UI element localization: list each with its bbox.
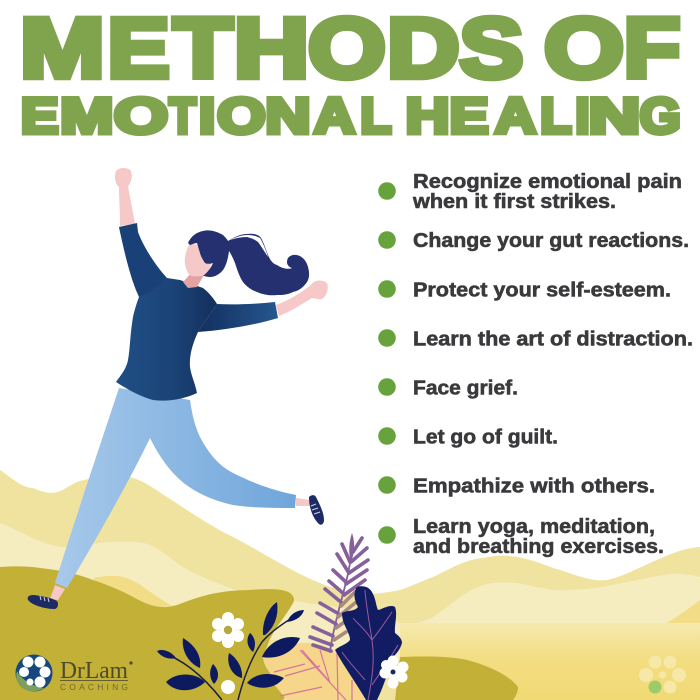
logo emblem bbox=[16, 654, 52, 692]
sweater extended sleeve bbox=[198, 302, 278, 332]
title bbox=[20, 1, 681, 144]
logo divider bbox=[60, 679, 128, 682]
back shoe bbox=[309, 495, 324, 525]
purple feather leaf bbox=[310, 533, 368, 652]
DrLam Coaching logo bbox=[16, 654, 133, 692]
title: D bbox=[387, 1, 460, 95]
title: A bbox=[314, 88, 355, 144]
white flower large bbox=[212, 612, 244, 648]
woman jumping figure bbox=[28, 168, 328, 609]
title: T bbox=[169, 88, 196, 144]
title: F bbox=[624, 1, 680, 95]
title: O bbox=[308, 1, 386, 95]
landscape background bbox=[0, 470, 700, 700]
title: O bbox=[217, 88, 266, 144]
title: O bbox=[544, 1, 624, 95]
title: T bbox=[174, 1, 232, 95]
item: face grief: Face grief. bbox=[413, 376, 518, 400]
title: O bbox=[114, 88, 168, 144]
title: E bbox=[450, 88, 489, 144]
title: N bbox=[589, 88, 640, 144]
title: L bbox=[540, 88, 572, 144]
watermark flower bbox=[639, 656, 686, 694]
item: learn yoga, meditation and breathing: Learn yoga, meditation, bbox=[413, 515, 655, 538]
item: recognize emotional pain: when it first strikes. bbox=[412, 190, 616, 213]
raised arm and fist bbox=[115, 168, 135, 226]
item: learn yoga, meditation and breathing bbox=[378, 515, 664, 558]
item: recognize emotional pain: Recognize emotional pain bbox=[413, 170, 682, 193]
title: I bbox=[199, 88, 215, 144]
title: M bbox=[20, 1, 105, 95]
logo registered mark bbox=[129, 661, 133, 665]
title: E bbox=[108, 1, 170, 95]
bullet list bbox=[378, 170, 693, 558]
title: M bbox=[60, 88, 113, 144]
item: learn yoga, meditation and breathing: and breathing exercises. bbox=[413, 535, 664, 558]
title: H bbox=[234, 1, 309, 95]
item: change your gut reactions: Change your gut reactions. bbox=[413, 229, 689, 252]
title: N bbox=[265, 88, 310, 144]
title: G bbox=[640, 88, 681, 144]
plants bbox=[157, 533, 408, 700]
white flower right bbox=[380, 656, 408, 688]
title: E bbox=[21, 88, 59, 144]
neck bbox=[183, 272, 204, 288]
extended arm and fist bbox=[276, 281, 328, 316]
item: let go of guilt: Let go of guilt. bbox=[413, 426, 558, 448]
title: L bbox=[360, 88, 390, 144]
title: I bbox=[575, 88, 590, 144]
face bbox=[185, 243, 211, 276]
item: recognize emotional pain bbox=[378, 170, 682, 213]
logo wordmark: DrLam bbox=[60, 658, 128, 684]
logo subtitle: COACHING bbox=[60, 682, 128, 692]
white flower small bbox=[221, 680, 235, 694]
sweater torso bbox=[116, 278, 217, 401]
item: empathize with others: Empathize with others. bbox=[413, 474, 655, 498]
hair and ponytail bbox=[188, 230, 309, 295]
left branch with navy leaves bbox=[157, 602, 304, 700]
title: H bbox=[406, 88, 449, 144]
ankles bbox=[50, 498, 310, 600]
sweater raised sleeve bbox=[119, 223, 167, 297]
item: learn the art of distraction: Learn the art of distraction. bbox=[413, 328, 693, 350]
dark oak leaf bbox=[335, 586, 402, 700]
peach leaf bbox=[263, 643, 370, 700]
item: protect your self-esteem: Protect your self-esteem. bbox=[413, 278, 671, 302]
front shoe bbox=[28, 595, 58, 609]
title: S bbox=[460, 1, 523, 95]
title: A bbox=[495, 88, 536, 144]
trousers bbox=[55, 388, 296, 588]
